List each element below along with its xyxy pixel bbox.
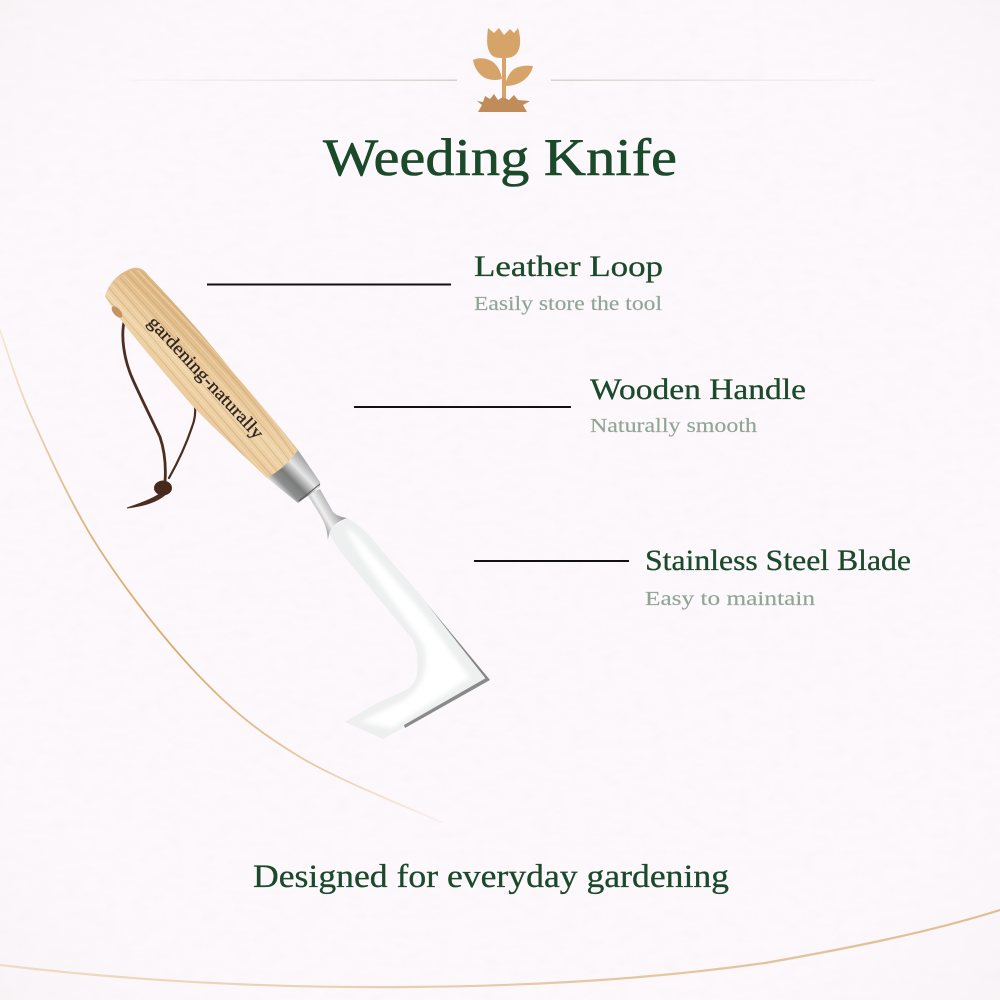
header divider: left	[130, 80, 457, 81]
gold arc: bottom sweep	[0, 910, 1000, 987]
product: weeding knife	[90, 255, 490, 739]
gold arc: left sweep	[0, 330, 443, 823]
loop hole	[110, 304, 124, 320]
blade highlight	[345, 528, 470, 728]
callout: wooden handle: Wooden Handle	[590, 373, 806, 406]
callout: stainless steel blade: Stainless Steel Blade	[645, 544, 911, 577]
shank	[307, 489, 347, 540]
steel ferrule	[267, 450, 320, 503]
header divider: right	[551, 80, 875, 81]
tagline: Designed for everyday gardening	[253, 859, 729, 895]
callout: leather loop: Easily store the tool	[474, 293, 662, 315]
callout: stainless steel blade: Easy to maintain	[645, 588, 815, 610]
callout: leather loop	[207, 250, 663, 315]
leather loop	[123, 318, 195, 508]
callout: leather loop: Leather Loop	[474, 250, 663, 283]
callout: wooden handle: Naturally smooth	[590, 415, 757, 437]
icon: tulip	[473, 28, 533, 112]
blade cutting edges	[427, 604, 490, 680]
handle branding: gardening-naturally	[144, 312, 268, 443]
callout: wooden handle	[354, 373, 806, 437]
blade	[328, 518, 490, 739]
callout: stainless steel blade	[474, 544, 911, 610]
title: Weeding Knife	[323, 129, 677, 187]
wooden handle	[105, 268, 298, 478]
